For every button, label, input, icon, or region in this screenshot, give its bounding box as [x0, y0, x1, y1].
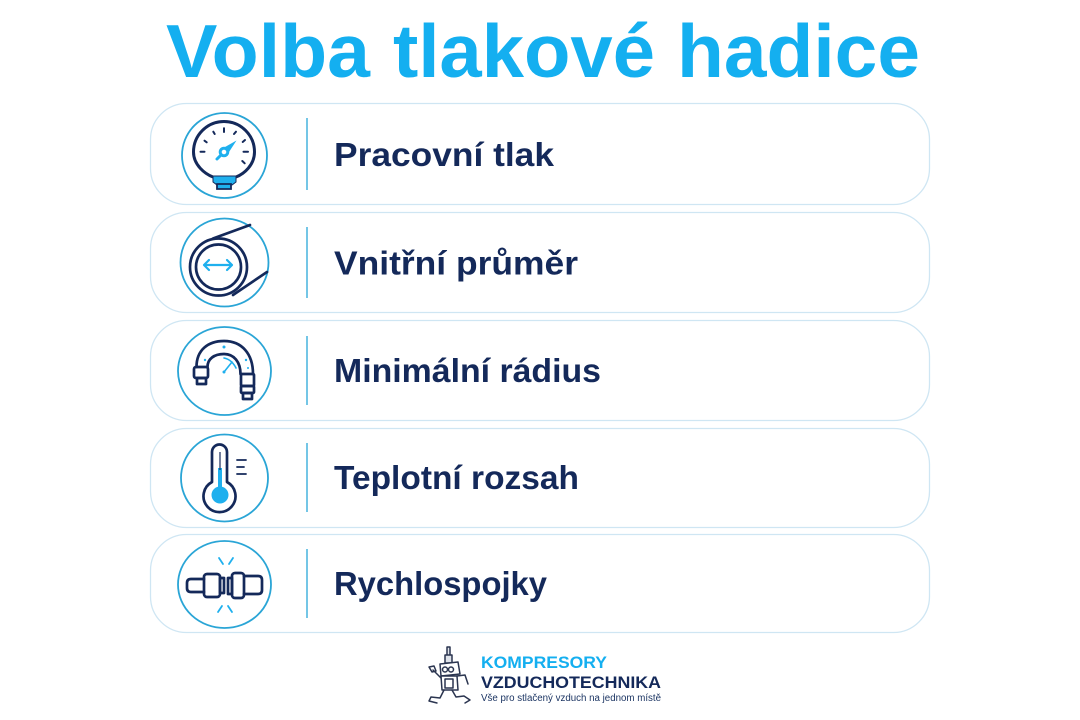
icon: pressure gauge: [182, 113, 267, 198]
label: Pracovní tlak: [334, 137, 554, 174]
panel: pracovní tlak: [150, 104, 930, 204]
divider: [306, 118, 308, 190]
divider: [306, 549, 308, 618]
panel: minimální rádius: [150, 320, 930, 420]
title: [166, 9, 920, 93]
icon: quick coupling: [178, 541, 271, 628]
title: tlakové: [393, 9, 655, 93]
icon: hose cross-section: [180, 218, 268, 306]
tagline: Vše pro stlačený vzduch na jednom místě: [481, 693, 662, 704]
panel: rychlospojky: [150, 534, 930, 632]
label: Rychlospojky: [334, 566, 547, 603]
icon: thermometer: [181, 434, 268, 522]
title: Volba: [166, 9, 371, 93]
logo: [429, 647, 662, 704]
panel: teplotní rozsah: [150, 428, 930, 528]
icon: compressor mascot: [429, 647, 470, 703]
divider: [306, 336, 308, 405]
label: Minimální rádius: [334, 353, 601, 390]
label: Teplotní rozsah: [334, 460, 579, 497]
title: hadice: [677, 9, 920, 93]
divider: [306, 227, 308, 298]
logo: VZDUCHOTECHNIKA: [481, 673, 661, 692]
panel: vnitřní průměr: [150, 212, 930, 312]
wordmark: KOMPRESORY: [481, 654, 607, 672]
label: Vnitřní průměr: [334, 246, 578, 282]
divider: [306, 443, 308, 512]
icon: bent hose with radius: [178, 327, 271, 415]
